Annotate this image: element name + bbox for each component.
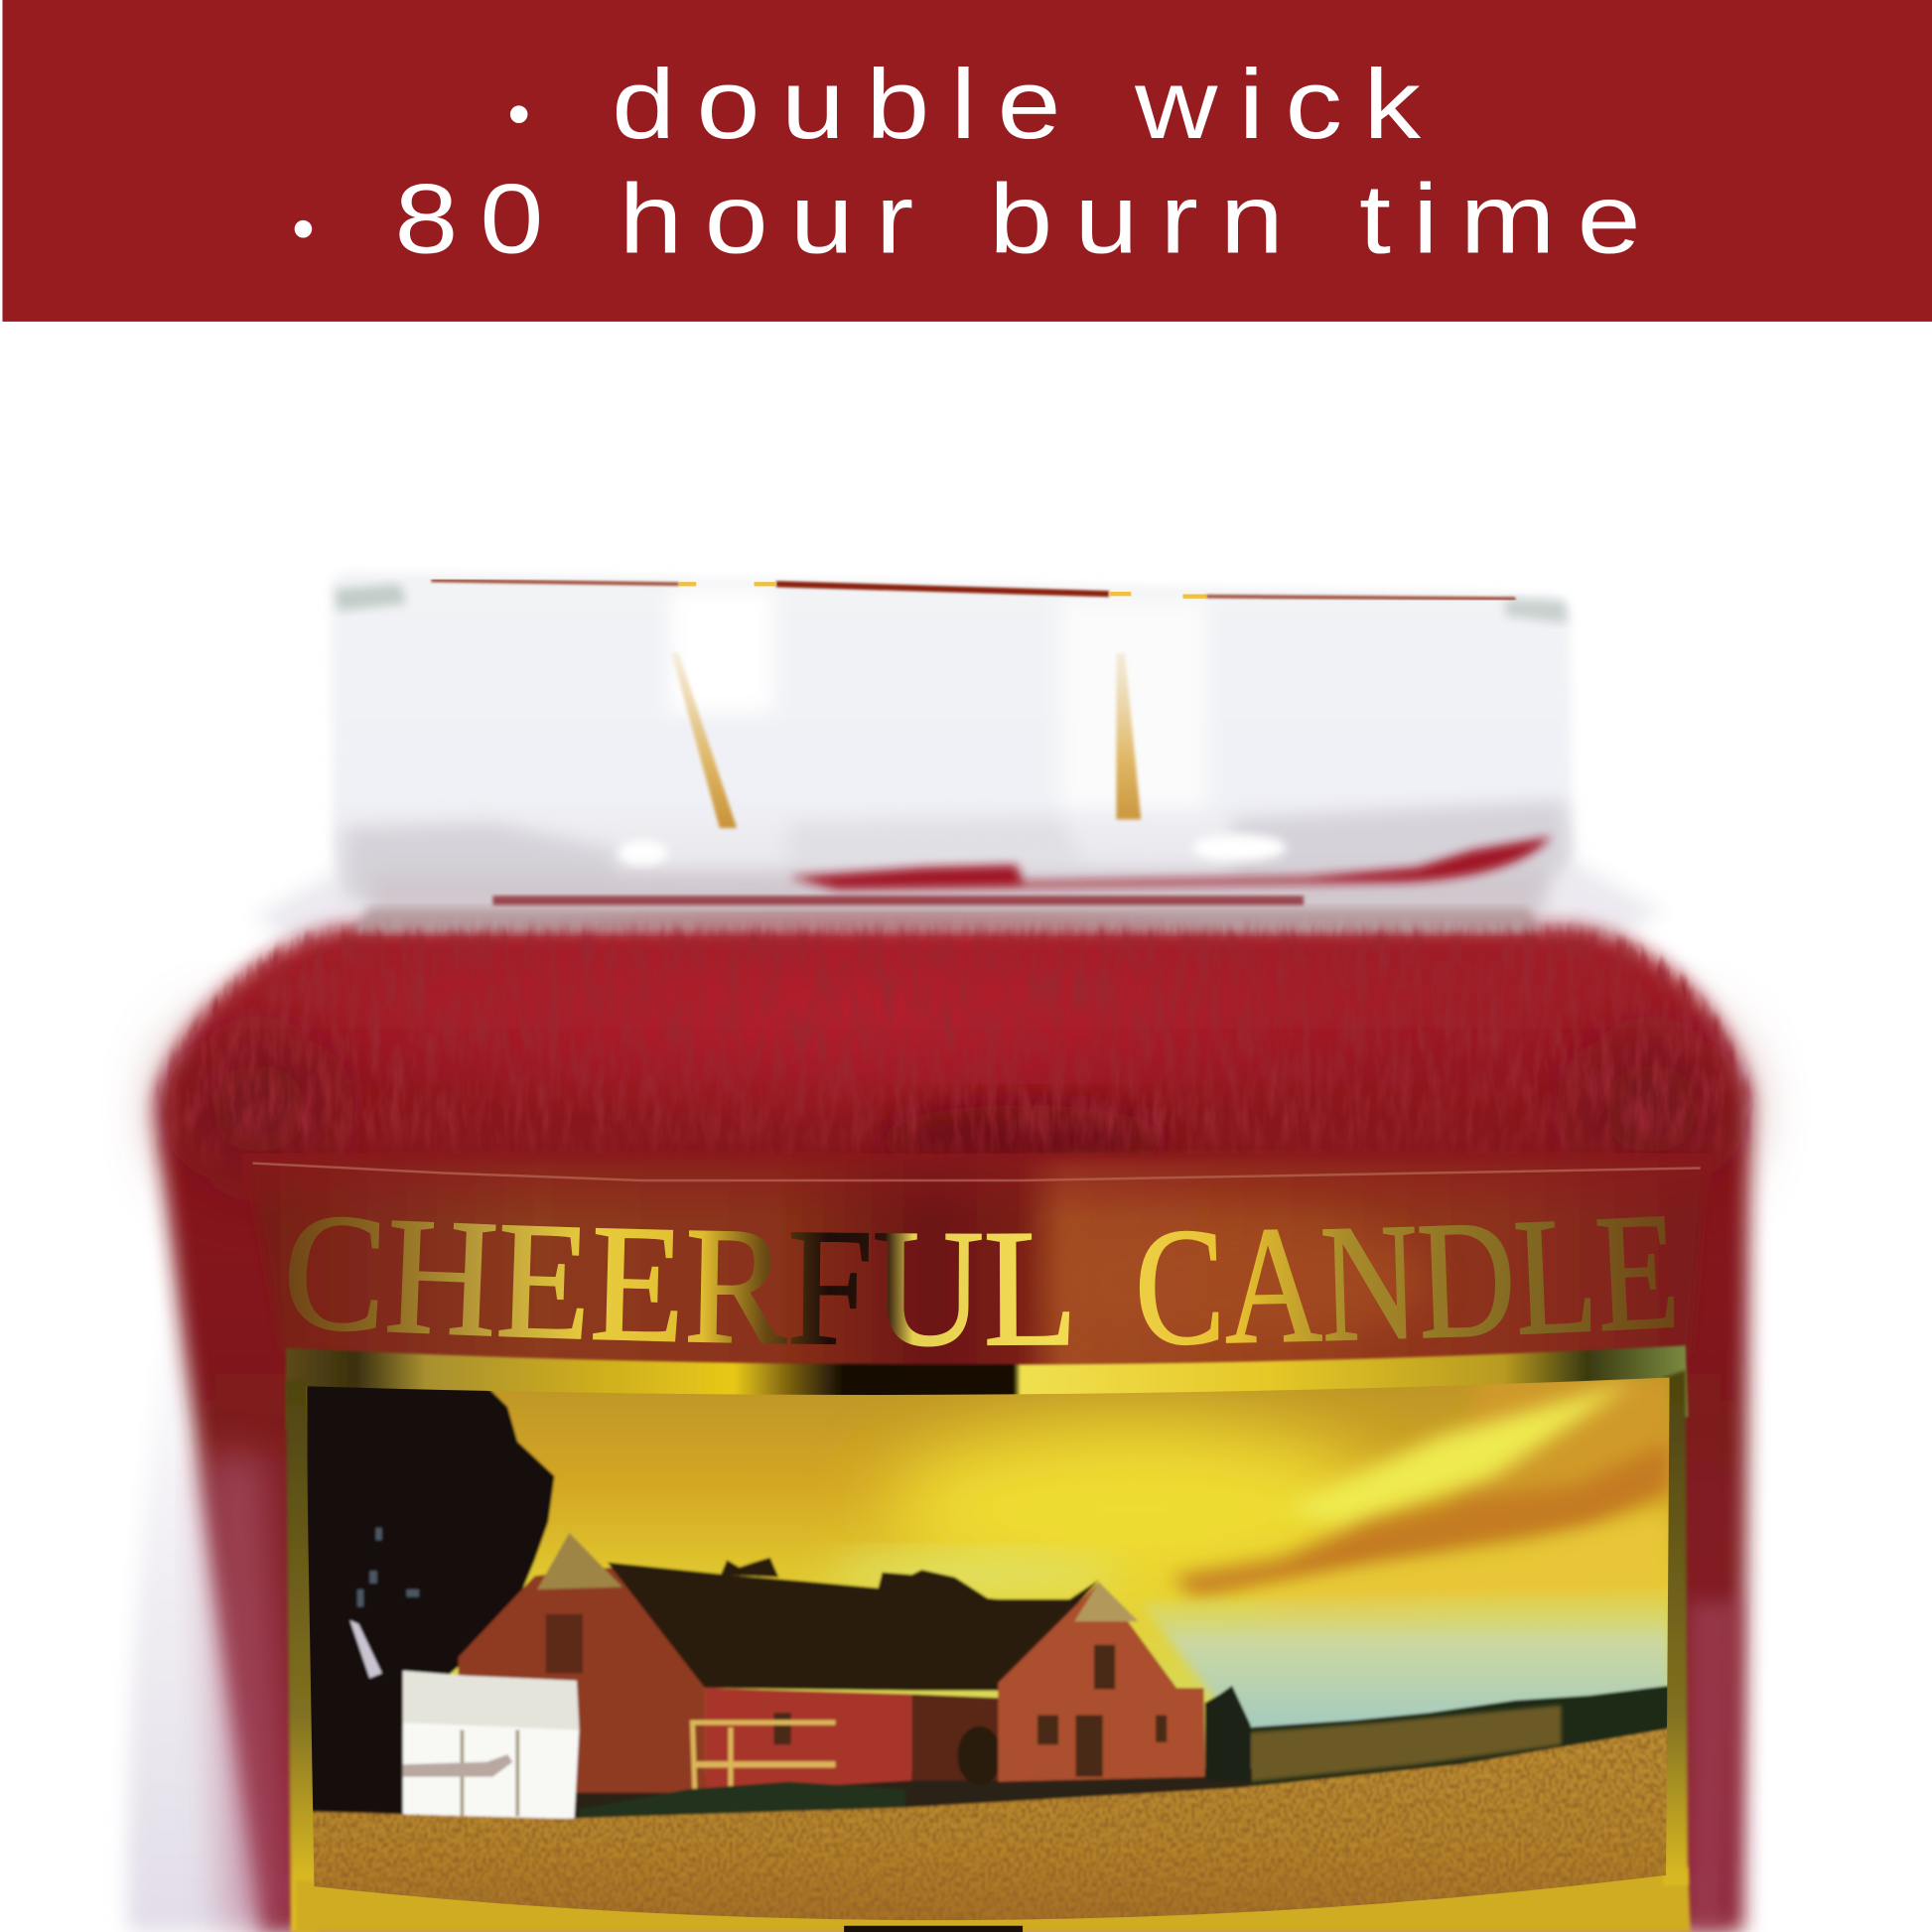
sky gold band: [1287, 1507, 1668, 1594]
main roof: [608, 1563, 1099, 1691]
flame glow columns: [670, 589, 773, 712]
horizon yellow glow: [826, 1555, 1121, 1594]
distant field strip: [1249, 1706, 1561, 1782]
glass neck and lip: [330, 572, 1573, 905]
tree white glint: [349, 1620, 382, 1678]
center door recess: [911, 1694, 1001, 1780]
wick right: [1116, 653, 1141, 819]
feature line 2: 80 hour burn time: [394, 164, 1641, 274]
farmhouse: [459, 1533, 1252, 1830]
middle brick wall: [705, 1688, 911, 1793]
cypress: [1205, 1686, 1251, 1780]
distant trees: [1247, 1686, 1670, 1787]
glass glints: [619, 840, 668, 865]
tree sky gaps: [357, 1528, 419, 1606]
neck shadow: [345, 801, 1570, 918]
flame glints on rim: [679, 584, 1206, 597]
wheat field: [296, 1727, 1676, 1932]
lower gold trim: [296, 1866, 1691, 1932]
wax side shadows: [185, 1035, 1725, 1182]
wax top surface: [351, 837, 1552, 931]
pale shoulder glass: [252, 863, 1663, 949]
left brick wing: [459, 1568, 705, 1793]
wax shadow: [875, 1105, 1171, 1174]
banner: product features: [2, 0, 1932, 322]
left gold edge: [286, 1380, 318, 1932]
label picture: [296, 1368, 1682, 1932]
grey lip corners: [336, 584, 407, 612]
rim wax line: [431, 581, 1516, 599]
sky upper right gold: [1468, 1378, 1668, 1499]
right gable wall: [998, 1583, 1205, 1782]
feature line 2: •: [292, 193, 315, 264]
dark base: [573, 1769, 1253, 1821]
white trailer: [403, 1671, 579, 1821]
band glow: [1059, 1220, 1430, 1343]
right gable cap: [1074, 1583, 1139, 1621]
wax body: [155, 926, 1749, 1932]
horizon pale sky: [1140, 1589, 1670, 1737]
trailer rails: [462, 1729, 517, 1816]
sky: [306, 1378, 1670, 1813]
brand name: CHEERFUL CANDLE: [289, 1215, 1674, 1346]
shrubs: [579, 1782, 905, 1821]
left gable cap: [537, 1533, 622, 1589]
candle jar: [121, 574, 1782, 1932]
sky orange clouds: [1171, 1442, 1670, 1596]
gold frame: [286, 1345, 1688, 1430]
chimneys: [721, 1558, 993, 1601]
lower glass edge: [128, 1282, 308, 1932]
sky yellow glow: [888, 1423, 1380, 1595]
wax highlight: [246, 911, 1478, 1134]
side fade of lower left glass: [204, 1453, 296, 1932]
side fade of right edge: [1688, 1601, 1739, 1932]
band pale line: [252, 1164, 1701, 1180]
feature line 1: •: [507, 78, 530, 150]
feature line 1: double wick: [612, 49, 1421, 159]
sky light streak: [1282, 1382, 1632, 1528]
left window: [546, 1614, 583, 1673]
wax texture: [153, 921, 1755, 1155]
right gold edge: [1663, 1370, 1688, 1885]
porch: [690, 1723, 835, 1796]
wick left: [671, 653, 737, 828]
tree: [306, 1380, 554, 1824]
trailer stripe: [403, 1754, 512, 1777]
lower centre dark notch: [844, 1926, 1023, 1932]
bush: [957, 1726, 1002, 1785]
right gable windows: [773, 1645, 1167, 1777]
label band: [242, 1154, 1706, 1366]
